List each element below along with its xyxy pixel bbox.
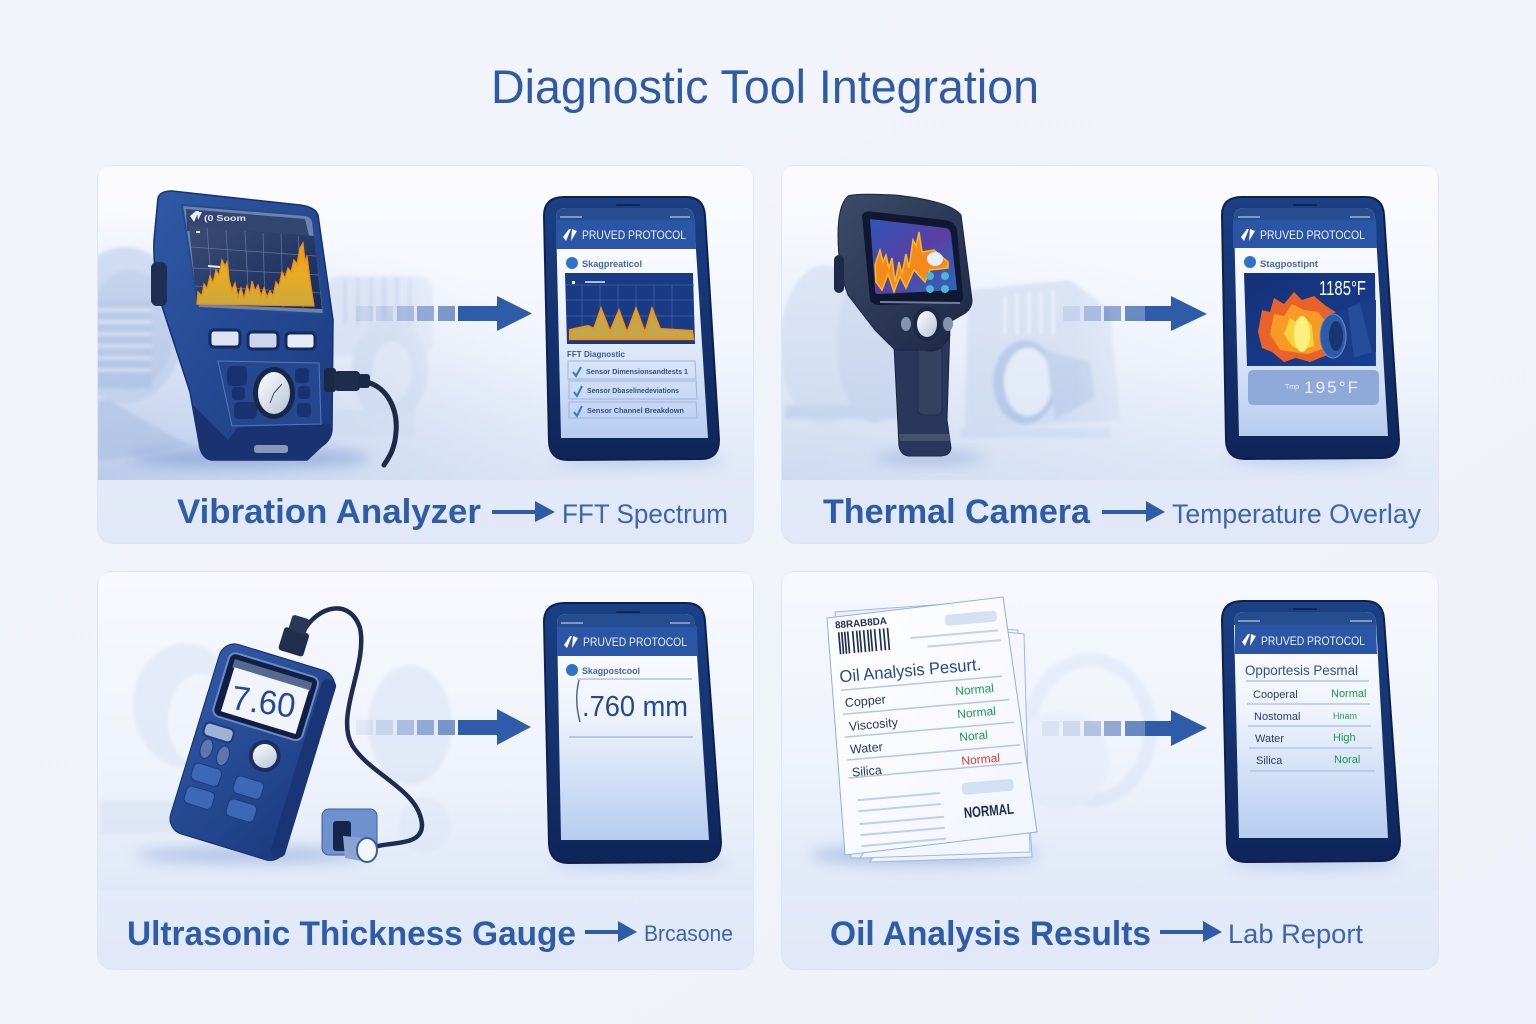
thickness value: .760 mm bbox=[582, 691, 688, 723]
phone spectrum chart bbox=[565, 273, 695, 344]
results table bbox=[1245, 662, 1375, 771]
arrow: gauge to phone bbox=[356, 709, 531, 745]
panel: ultrasonic thickness gauge bbox=[98, 572, 754, 970]
results table: Water bbox=[1255, 733, 1284, 745]
panel: thermal camera bbox=[780, 166, 1438, 544]
caption: ultrasonic thickness gauge: Brcasone bbox=[644, 921, 733, 946]
results table: Nostomal bbox=[1254, 711, 1300, 723]
phone: FFT spectrum: FFT Diagnostic bbox=[567, 350, 626, 359]
caption: vibration analyzer: Vibration Analyzer bbox=[177, 493, 481, 531]
icon: lab report: Oil Analysis Pesurt. bbox=[839, 655, 982, 686]
caption: vibration analyzer: FFT Spectrum bbox=[562, 499, 728, 529]
caption: oil analysis results: Oil Analysis Results bbox=[830, 915, 1151, 953]
phone: thickness reading: PRUVED PROTOCOL bbox=[583, 637, 688, 649]
caption: oil analysis results: Lab Report bbox=[1228, 919, 1363, 949]
panel: oil analysis results bbox=[782, 572, 1438, 970]
thickness value bbox=[569, 679, 693, 737]
caption: thermal camera: Temperature Overlay bbox=[1172, 499, 1421, 529]
gauge shadow bbox=[135, 847, 365, 863]
icon: lab report: Copper bbox=[844, 692, 886, 710]
arrow: report to phone bbox=[1042, 710, 1207, 746]
icon: vibration analyzer device: (0 Soom bbox=[204, 214, 246, 223]
icon: lab report: Noral bbox=[959, 728, 988, 744]
phone: temperature overlay bbox=[1222, 197, 1400, 464]
results table: High bbox=[1333, 732, 1356, 744]
checklist rows: Sensor Channel Breakdown bbox=[587, 406, 684, 415]
phone: thickness reading bbox=[544, 603, 725, 868]
phone: temperature overlay: PRUVED PROTOCOL bbox=[1260, 230, 1366, 242]
icon: lab report: Silica bbox=[851, 763, 882, 780]
checklist rows bbox=[568, 361, 697, 418]
icon: lab report: Normal bbox=[957, 704, 996, 721]
temperature readout: 195°F bbox=[1304, 378, 1358, 397]
title: Diagnostic Tool Integration bbox=[491, 60, 1039, 113]
icon: lab report: Viscosity bbox=[848, 715, 899, 734]
phone: FFT spectrum: PRUVED PROTOCOL bbox=[582, 230, 687, 242]
icon: lab report: Water bbox=[849, 740, 883, 757]
camera shadow bbox=[875, 453, 985, 463]
thermal image: 1185°F bbox=[1319, 278, 1366, 300]
background machine bbox=[102, 643, 452, 832]
icon: ultrasonic thickness gauge bbox=[166, 608, 422, 865]
caption: thermal camera bbox=[823, 493, 1421, 531]
phone: temperature overlay: Stagpostipnt bbox=[1260, 259, 1319, 270]
panel: vibration analyzer bbox=[65, 166, 754, 544]
icon: lab report bbox=[827, 597, 1037, 862]
report shadow bbox=[810, 845, 1040, 865]
temperature readout: Tmp bbox=[1285, 384, 1299, 391]
phone: lab report bbox=[1222, 601, 1400, 868]
analyzer shadow bbox=[130, 449, 370, 467]
icon: vibration analyzer device bbox=[151, 191, 396, 465]
caption: oil analysis results bbox=[830, 915, 1363, 953]
arrow: analyzer to phone bbox=[356, 296, 532, 331]
caption: vibration analyzer bbox=[177, 493, 728, 531]
arrow: camera to phone bbox=[1063, 296, 1207, 331]
icon: lab report: NORMAL bbox=[963, 801, 1015, 822]
icon: thermal camera bbox=[834, 194, 972, 456]
caption: thermal camera: Thermal Camera bbox=[823, 493, 1091, 531]
phone: FFT spectrum bbox=[544, 197, 725, 466]
results table: Noral bbox=[1334, 754, 1360, 766]
background machine bbox=[780, 265, 1120, 438]
checklist rows: Sensor Dbaselinedeviations bbox=[587, 386, 679, 395]
results table: Normal bbox=[1331, 688, 1366, 700]
background machine bbox=[65, 247, 433, 460]
phone: thickness reading: Skagpostcool bbox=[582, 666, 640, 677]
results table: Hnam bbox=[1333, 711, 1357, 721]
results table: Silica bbox=[1256, 755, 1283, 767]
icon: lab report: Normal bbox=[961, 751, 1001, 768]
results table: Opportesis Pesmal bbox=[1245, 662, 1358, 678]
checklist rows: Sensor Dimensionsandtests 1 bbox=[586, 367, 688, 376]
phone: FFT spectrum: Skagpreaticol bbox=[582, 259, 642, 270]
phone: lab report: PRUVED PROTOCOL bbox=[1261, 636, 1366, 648]
background machine bbox=[1010, 660, 1150, 810]
icon: lab report: Normal bbox=[955, 681, 994, 698]
results table: Cooperal bbox=[1253, 689, 1298, 701]
icon: ultrasonic thickness gauge: 7.60 bbox=[229, 679, 298, 726]
thermal image bbox=[1244, 273, 1376, 366]
caption: ultrasonic thickness gauge: Ultrasonic Thickness Gauge bbox=[127, 915, 576, 953]
temperature readout bbox=[1248, 370, 1379, 405]
icon: lab report: 88RAB8DA bbox=[835, 616, 887, 632]
